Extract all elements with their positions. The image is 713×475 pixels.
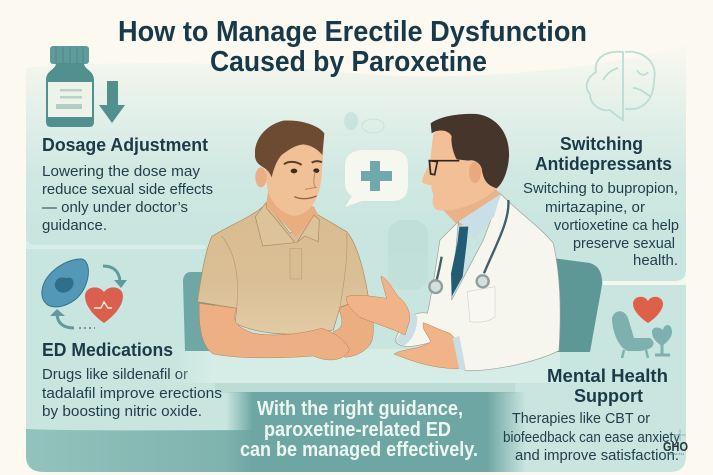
text: mental health support: and improve satisfaction. [515,447,679,464]
table [175,349,560,383]
text: switching antidepressants: health. [633,252,678,269]
text: switching antidepressants: preserve sexual [573,235,675,252]
text: ed medications: by boosting nitric oxide. [42,403,202,420]
teal footer band [26,429,268,472]
doctor neck [440,180,501,226]
text: mental health support [503,410,680,464]
text: ed medications: tadalafil improve erections [42,385,222,402]
figure: patient [197,120,373,360]
patient collar [255,203,319,246]
doctor wrist cuff [453,336,466,371]
heading: switching antidepressants [535,134,672,174]
logo watermark: GHO [663,439,688,454]
doctor ear [469,162,481,183]
heading: switching antidepressants: Switching [560,134,643,154]
patient head [266,135,324,216]
doctor stethoscope [429,200,508,293]
doctor pocket [467,287,495,322]
heading: dosage adjustment: Dosage Adjustment [42,135,208,155]
closing message: paroxetine-related ED [264,418,451,441]
text: mental health support: Therapies like CBT or [512,410,650,427]
panel divider: dosage and medications [26,236,205,249]
doctor gesturing hand [346,277,410,335]
text: dosage adjustment: reduce sexual side effects [42,181,213,198]
title: How to Manage Erectile Dysfunction [118,16,587,48]
text: dosage adjustment: Lowering the dose may [42,163,201,180]
text: ed medications: Drugs like sildenafil or [42,366,188,383]
doctor glasses [429,161,459,175]
text: dosage adjustment: guidance. [42,217,107,234]
text: dosage adjustment [42,163,213,234]
patient face details [284,161,322,199]
heading: switching antidepressants: Antidepressants [535,154,672,174]
panel divider: switching and mental health [603,270,686,285]
patient arm left [199,303,349,360]
faint background shapes [344,112,428,290]
text: dosage adjustment: — only under doctor’s [42,199,188,216]
doctor lower hand [394,323,463,369]
text: switching antidepressants: Switching to bupropion, [523,180,678,197]
icon: brain outline [587,52,655,120]
heading: ed medications: ED Medications [42,340,173,360]
figure: doctor [346,114,560,371]
patient placket [290,248,302,279]
text: switching antidepressants [523,180,679,269]
doctor shirt [458,194,501,240]
logo watermark: HEALTH [667,452,684,456]
heading: mental health support [547,366,668,406]
patient sleeve seam [222,233,347,308]
patient ear [255,167,267,187]
text: mental health support: biofeedback can ease anxiety [503,429,680,446]
closing message [240,397,478,461]
icon: pill, heart and cycle arrows [42,259,127,328]
title: Caused by Paroxetine [210,46,487,78]
doctor coat [395,194,560,371]
chair: patient [183,272,215,351]
patient shirt [197,203,368,334]
patient arm right [333,297,373,357]
doctor cuff [395,311,417,346]
speech bubble with medical cross [345,150,408,207]
icon: medicine bottle with down arrow [46,46,125,127]
chair: doctor [552,258,602,352]
closing message: With the right guidance, [257,397,463,420]
doctor hair [431,114,509,188]
doctor head [422,123,500,211]
heading: mental health support: Mental Health [547,366,668,386]
heading: mental health support: Support [574,386,643,406]
doctor tie [451,227,468,297]
title [118,16,587,78]
patient hair [255,120,324,177]
patient neck [266,190,318,237]
logo watermark [663,429,688,456]
closing message: can be managed effectively. [240,438,478,461]
panel: call to action [215,383,526,472]
text: switching antidepressants: vortioxetine ca help [554,217,679,234]
text: ed medications [42,366,222,420]
icon: chair and hearts [612,297,672,358]
text: switching antidepressants: mirtazapine, or [545,199,645,216]
